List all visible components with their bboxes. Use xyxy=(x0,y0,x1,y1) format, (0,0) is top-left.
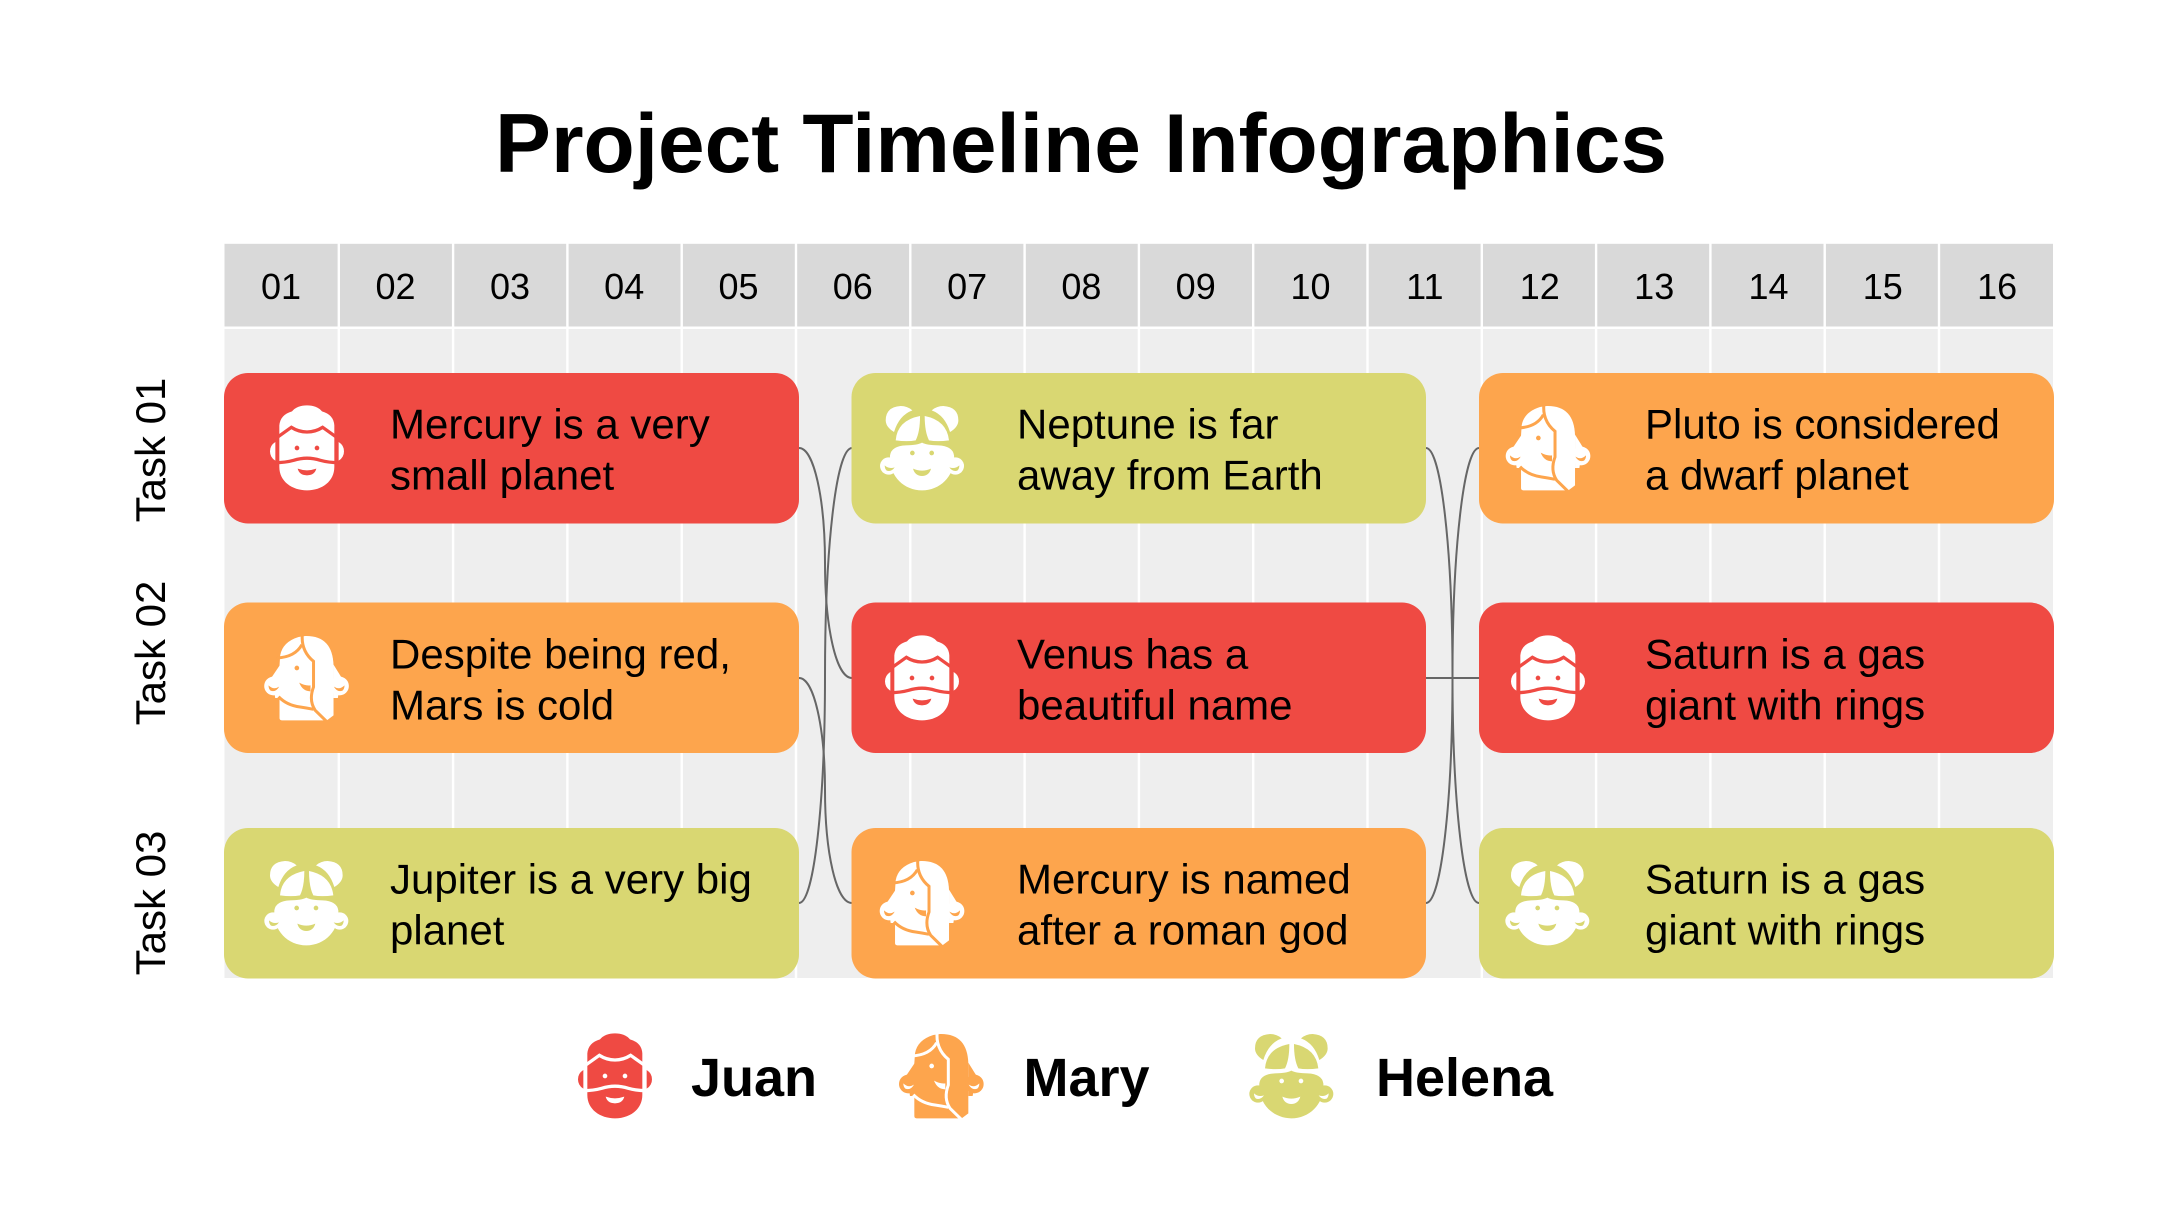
task card: Saturn, Juan xyxy=(1479,602,2054,753)
task card: Pluto, Mary: Pluto is considered xyxy=(1645,401,2000,448)
legend: Helena xyxy=(1249,1034,1554,1118)
task card: Mercury, Juan: Mercury is a very xyxy=(390,401,710,448)
week numbers: 05 xyxy=(718,266,759,307)
week numbers: 16 xyxy=(1977,266,2017,307)
task card: Mercury, Mary: after a roman god xyxy=(1017,907,1349,954)
task card: Saturn, Helena xyxy=(1479,828,2054,978)
week numbers xyxy=(261,266,2017,307)
week numbers: 01 xyxy=(261,266,301,307)
task card: Saturn, Juan: Saturn is a gas xyxy=(1645,631,1925,678)
connectors between tasks xyxy=(799,448,1479,903)
task labels xyxy=(127,378,174,975)
task card: Jupiter, Helena: planet xyxy=(390,907,505,954)
week numbers: 10 xyxy=(1290,266,1331,307)
task labels: Task 02 xyxy=(127,581,174,725)
legend xyxy=(578,1031,1554,1121)
task card: Mercury, Juan xyxy=(224,373,799,524)
task card: Pluto, Mary xyxy=(1479,373,2054,524)
task card: Neptune, Helena xyxy=(852,373,1426,524)
week numbers: 07 xyxy=(947,266,987,307)
task card: Saturn, Juan: giant with rings xyxy=(1645,682,1925,729)
week numbers: 08 xyxy=(1061,266,1101,307)
task card: Mercury, Mary: Mercury is named xyxy=(1017,856,1351,903)
task card: Mars, Mary: Despite being red, xyxy=(390,631,731,678)
task card: Neptune, Helena: Neptune is far xyxy=(1017,401,1278,448)
task card: Jupiter, Helena: Jupiter is a very big xyxy=(390,856,752,903)
task labels: Task 01 xyxy=(127,378,174,522)
week numbers: 06 xyxy=(833,266,873,307)
week numbers: 15 xyxy=(1863,266,1903,307)
legend: Juan: Juan xyxy=(691,1048,817,1108)
legend: Mary xyxy=(899,1031,1150,1121)
timeline grid xyxy=(224,243,2053,978)
week numbers: 09 xyxy=(1176,266,1216,307)
task card: Mars, Mary xyxy=(224,602,799,753)
legend: Helena: Helena xyxy=(1376,1048,1554,1108)
task card: Mercury, Juan: small planet xyxy=(390,452,614,499)
title: Project Timeline Infographics xyxy=(495,96,1667,190)
task card: Mercury, Mary xyxy=(852,828,1426,978)
task labels: Task 03 xyxy=(127,831,174,975)
week numbers: 14 xyxy=(1748,266,1789,307)
task card: Jupiter, Helena xyxy=(224,828,799,978)
task card: Saturn, Helena: giant with rings xyxy=(1645,907,1925,954)
task card: Saturn, Helena: Saturn is a gas xyxy=(1645,856,1925,903)
task card: Venus, Juan: beautiful name xyxy=(1017,682,1293,729)
week numbers: 04 xyxy=(604,266,644,307)
week numbers: 12 xyxy=(1520,266,1560,307)
task card: Mars, Mary: Mars is cold xyxy=(390,682,614,729)
task card: Neptune, Helena: away from Earth xyxy=(1017,452,1323,499)
legend: Juan xyxy=(578,1033,817,1118)
week numbers: 03 xyxy=(490,266,530,307)
task card: Venus, Juan: Venus has a xyxy=(1017,631,1249,678)
task card: Pluto, Mary: a dwarf planet xyxy=(1645,452,1909,499)
week numbers: 11 xyxy=(1406,266,1443,307)
task card: Venus, Juan xyxy=(852,602,1426,753)
legend: Mary: Mary xyxy=(1024,1048,1150,1108)
week numbers: 02 xyxy=(375,266,416,307)
week numbers: 13 xyxy=(1634,266,1674,307)
